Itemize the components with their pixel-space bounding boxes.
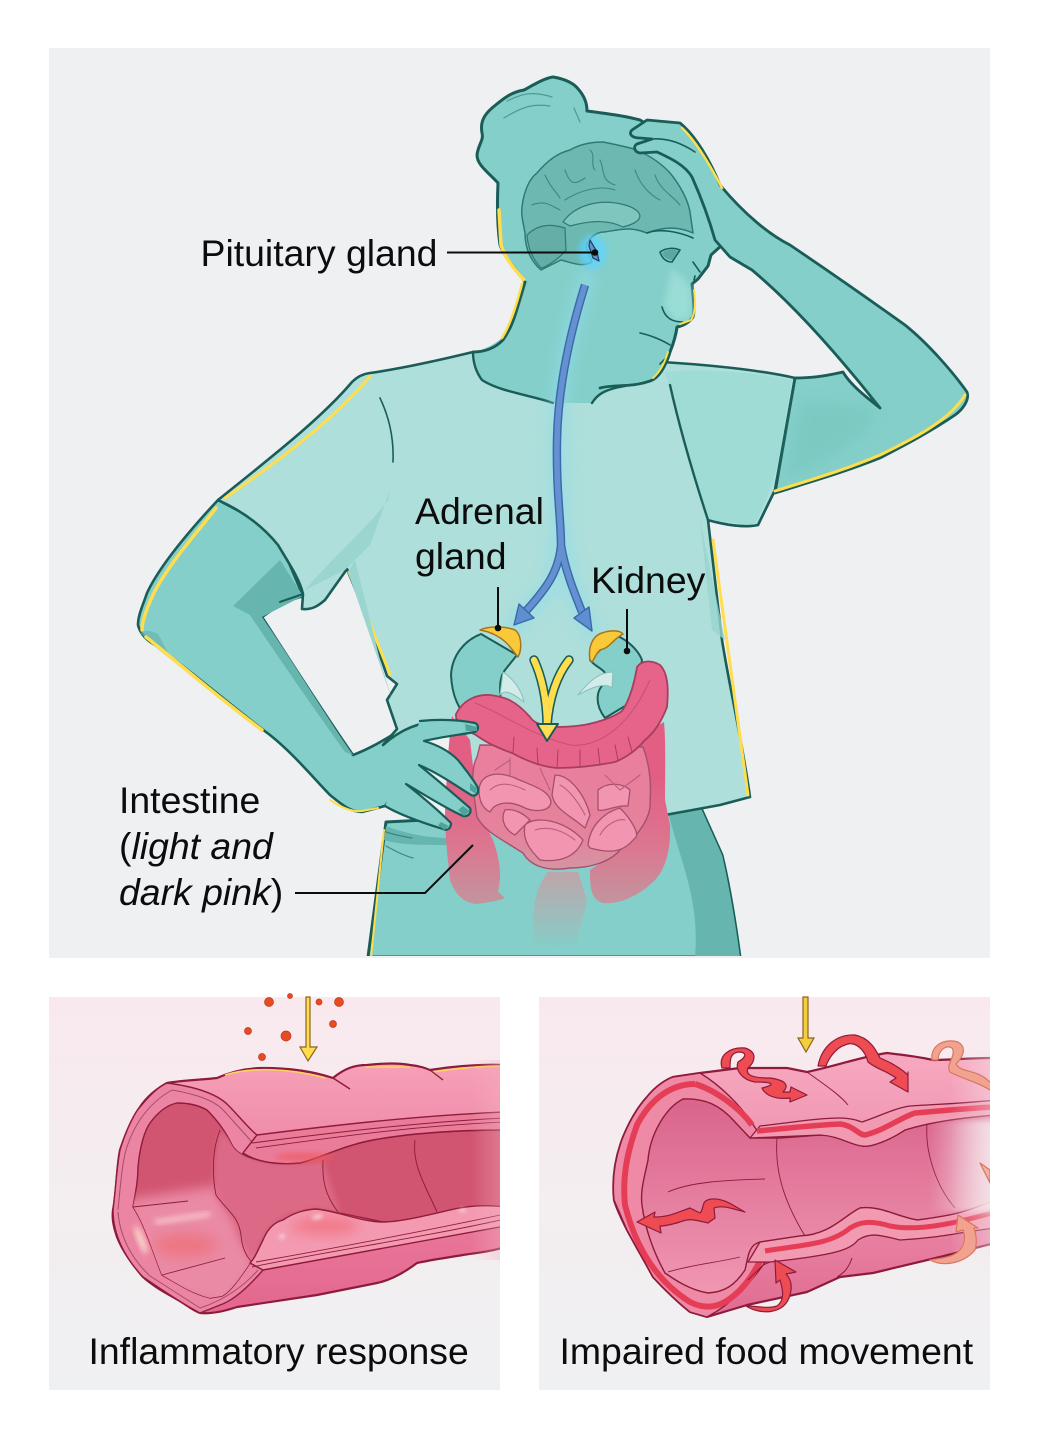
torso lower / pants [368,806,740,957]
yellow down arrow [798,997,814,1052]
shirt [218,350,795,815]
label: Intestine: ) [271,871,283,913]
peristalsis arrows [637,1035,995,1312]
wavy arrow top left [721,1048,807,1102]
muscle ring (red) [624,1084,762,1307]
interior creases [133,1130,437,1275]
panel: main figure background [49,48,990,958]
label: Intestine: (light and [119,825,273,867]
large intestine: ascending and descending [445,716,670,904]
adrenal glands [480,627,623,662]
top cut wall [243,1112,505,1164]
label: Adrenal gland: gland [415,535,506,577]
caption: Impaired food movement [560,1330,974,1372]
leader: intestine [295,845,473,893]
top wall with red muscle [750,1100,995,1146]
label: Intestine: dark pink [119,871,273,913]
left hand fingers over intestine [385,720,478,830]
pituitary gland [579,235,607,269]
nose highlight [664,268,692,322]
yellow converging arrow [534,660,569,741]
hair line yellow highlight [499,210,524,340]
fade to background on right [932,1056,990,1254]
panel: inflammatory response [49,994,505,1390]
panel: impaired food movement [539,997,995,1390]
facial features: brow, eye, nose, mouth [640,231,700,378]
label: Intestine: Intestine [119,779,260,821]
rectum [533,872,587,940]
loop arrow top centre [818,1035,908,1092]
tube: impaired intestine [613,1050,995,1317]
bottom arrow [746,1260,796,1312]
neck collar [473,282,677,403]
yellow down arrow [300,997,317,1061]
interior arrow [637,1199,745,1233]
ring cut face [113,1083,263,1313]
kidneys with renal pelvis [451,634,642,720]
right arm and hand on head [630,120,968,493]
transverse colon [456,661,668,768]
leader: adrenal [495,587,501,631]
blue arrow: pituitary to adrenals [514,280,592,631]
label: Pituitary gland: Pituitary gland [200,232,437,274]
label: Kidney: Kidney [591,559,706,601]
tube: inflamed intestine [113,1060,505,1313]
leader: kidney [624,609,630,654]
inflammation patches [153,1233,217,1257]
bottom cut wall [250,1206,505,1270]
small intestine [473,745,651,869]
left forearm and upper arm [138,500,420,812]
tube top highlight [225,1066,500,1078]
lumen [642,1099,995,1293]
bottom right arrow (faded) [930,1215,978,1264]
lumen interior [133,1103,505,1298]
head and neck [476,76,720,362]
caption: Inflammatory response [88,1330,469,1372]
wavy arrow top right (faded) [932,1041,995,1090]
bottom wall with red muscle [748,1206,990,1263]
illustration: person with organs [138,77,968,957]
leader: pituitary [447,249,598,256]
red particles [244,994,344,1060]
brain [522,142,693,270]
label: Adrenal gland: Adrenal [415,490,544,532]
